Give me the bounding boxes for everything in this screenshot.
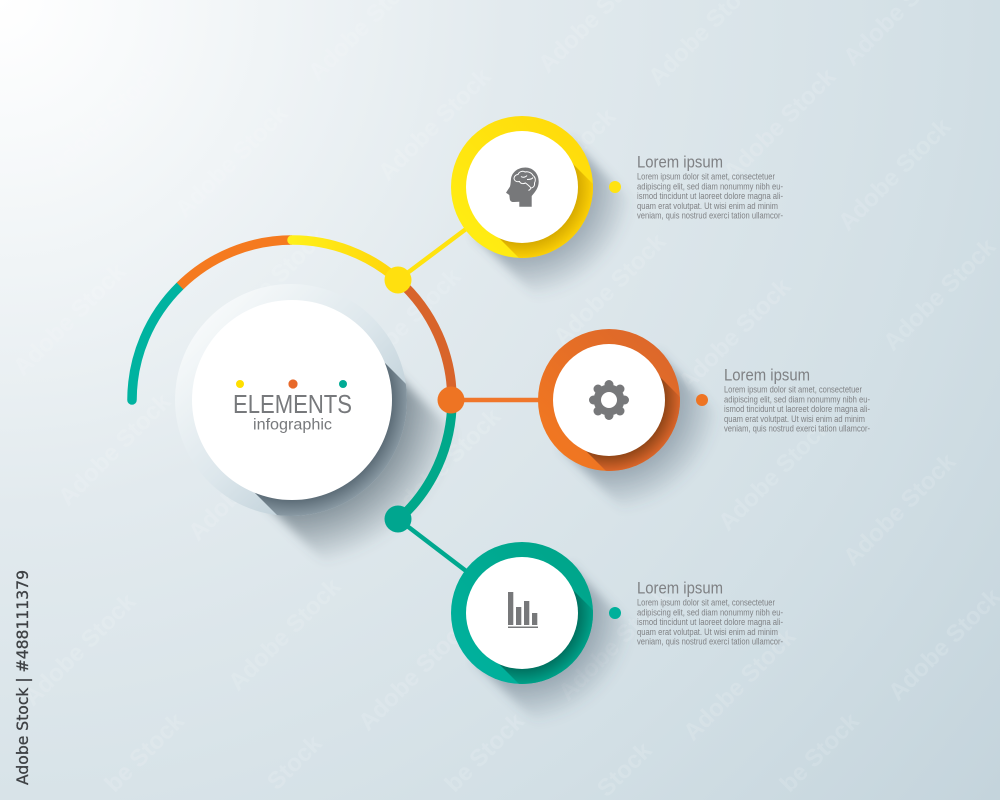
item 2 text: [724, 366, 870, 434]
item 2 text: Lorem ipsum dolor sit amet, consectetuer: [724, 384, 862, 394]
icon: bar chart: [508, 592, 538, 628]
watermark pattern: Adobe Stock: [553, 583, 677, 706]
watermark pattern: be Stock: [440, 707, 530, 798]
watermark pattern: be Stock: [775, 707, 865, 798]
watermark pattern: Adobe Stock: [223, 573, 347, 696]
watermark pattern: Adobe Stock: [678, 623, 802, 746]
halo disc: [175, 284, 407, 516]
ring outer shadow: [474, 139, 670, 335]
item 3 text: quam erat volutpat. Ut wisi enim ad minim: [637, 627, 778, 637]
long shadow outside halo: [227, 335, 477, 585]
watermark pattern: be Stock: [100, 707, 190, 798]
ring outer shadow: [561, 352, 757, 548]
item 1 text: Lorem ipsum: [637, 152, 723, 172]
item 3 text: adipiscing elit, sed diam nonummy nibh eu-: [637, 607, 783, 617]
watermark pattern: Adobe Stock: [8, 258, 132, 381]
long shadow inside halo: [254, 362, 407, 516]
item 1 text: quam erat volutpat. Ut wisi enim ad minim: [637, 201, 778, 211]
item 3 text: [637, 578, 783, 647]
watermark pattern: Adobe Stock: [718, 63, 842, 186]
icon: head with brain: [506, 168, 539, 207]
watermark pattern: Adobe Stock: [673, 273, 797, 396]
item 1 text: ismod tincidunt ut laoreet dolore magna ali-: [637, 191, 783, 201]
item 1 text: veniam, quis nostrud exerci tation ullamcor-: [637, 211, 783, 221]
watermark pattern: Adobe Stock: [353, 613, 477, 736]
item 2 text: Lorem ipsum: [724, 366, 810, 384]
item 3 text: Lorem ipsum: [637, 578, 723, 598]
white disc: [466, 131, 578, 243]
white disc: [553, 344, 665, 456]
item 2 text: quam erat volutpat. Ut wisi enim ad minim: [724, 414, 865, 424]
watermark pattern: Adobe Stock: [208, 223, 332, 346]
node: yellow: [384, 266, 412, 294]
item 3 text: Lorem ipsum dolor sit amet, consectetuer: [637, 598, 775, 608]
watermark pattern: Adobe Stock: [383, 403, 507, 526]
item 2 bullet: [696, 394, 708, 406]
connector: yellow: [398, 226, 470, 280]
watermark pattern: Adobe Stock: [43, 58, 167, 181]
item 1: yellow ring with brain icon: [451, 116, 628, 292]
segmented arc: [132, 240, 452, 520]
ring: [451, 542, 593, 684]
watermark pattern: Adobe Stock: [838, 448, 962, 571]
item 3 text: veniam, quis nostrud exerci tation ullamcor-: [637, 637, 783, 647]
colour dots: [236, 379, 347, 389]
stock id label: Adobe Stock | #488111379: [13, 570, 32, 785]
watermark pattern: Adobe Stock: [183, 423, 307, 546]
ring outer shadow: [474, 565, 670, 761]
item 2 text: adipiscing elit, sed diam nonummy nibh eu-: [724, 394, 870, 404]
ring inner long shadow: [499, 590, 593, 684]
ring: [538, 329, 680, 471]
item 3: teal ring with bar chart icon: [451, 542, 627, 718]
node: orange: [438, 386, 464, 414]
central circle with halo and long shadow: [175, 285, 446, 559]
ring inner long shadow: [586, 376, 680, 471]
white disc: [466, 557, 578, 669]
item 2 text: veniam, quis nostrud exerci tation ullamcor-: [724, 424, 870, 434]
node: teal: [384, 506, 412, 532]
central subtitle: infographic: [253, 416, 332, 434]
watermark pattern: Adobe Stock: [548, 228, 672, 351]
watermark pattern: Adobe Stock: [498, 103, 622, 226]
item 1 text: [637, 152, 783, 221]
watermark pattern: Adobe Stock: [18, 588, 142, 711]
item 1 text: adipiscing elit, sed diam nonummy nibh eu-: [637, 181, 783, 191]
watermark pattern: Adobe Stock: [53, 388, 177, 511]
ring inner long shadow: [499, 164, 593, 258]
watermark pattern: Stock: [262, 730, 328, 795]
item 1 bullet: [609, 181, 621, 193]
watermark pattern: Adobe Stock: [833, 113, 957, 236]
item 3 bullet: [609, 607, 621, 619]
watermark pattern: Adobe Stock: [373, 63, 497, 186]
watermark pattern: Adobe Stock: [343, 263, 467, 386]
item 3 text: ismod tincidunt ut laoreet dolore magna ali-: [637, 617, 783, 627]
watermark pattern: Adobe Stock: [713, 413, 837, 536]
watermark pattern: Adobe Stock: [878, 233, 1000, 356]
ring: [451, 116, 593, 258]
item 1 text: Lorem ipsum dolor sit amet, consectetuer: [637, 172, 775, 182]
icon: gear: [589, 380, 629, 420]
connector: teal: [398, 519, 470, 574]
connector: orange: [451, 398, 545, 402]
white disc: [192, 300, 392, 500]
item 2 text: ismod tincidunt ut laoreet dolore magna ali-: [724, 404, 870, 414]
central title: ELEMENTS: [233, 389, 352, 419]
watermark pattern: Adobe Stock: [170, 100, 294, 223]
item 2: orange ring with gear icon: [538, 329, 714, 505]
